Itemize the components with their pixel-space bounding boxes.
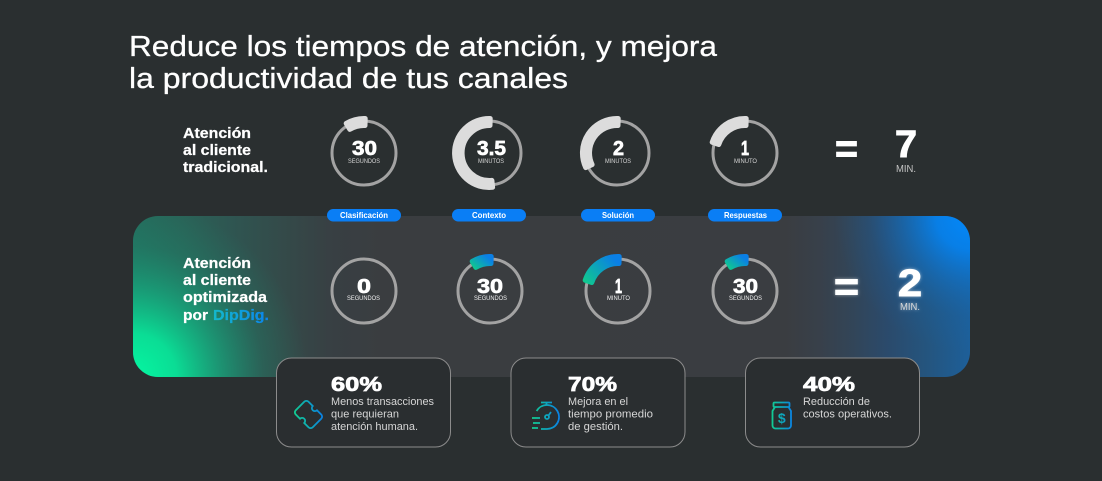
gauge: 1 minuto optimized: MINUTO — [607, 295, 630, 302]
gauge: 30 segundos optimized second: 30 — [733, 276, 758, 298]
card: 40%: 40% — [803, 374, 855, 396]
gauge: 0 segundos: 0 — [357, 276, 371, 298]
total: 2 min — [834, 263, 922, 313]
card: 60%: atención humana. — [331, 421, 418, 433]
gauge: 3.5 minutos: MINUTOS — [478, 158, 505, 165]
heading: traditional attention: al cliente — [183, 142, 251, 159]
gauge: 3.5 minutos — [455, 118, 521, 187]
gauge: 30 segundos optimized second — [713, 256, 777, 323]
total: 2 min: = — [834, 265, 859, 309]
total: 7 min — [835, 124, 917, 175]
total: 2 min: MIN. — [900, 302, 920, 313]
gauge: 1 minuto optimized — [585, 256, 650, 323]
gauge: 30 segundos optimized: SEGUNDOS — [474, 295, 508, 302]
pill: Contexto — [452, 209, 526, 222]
gauge: 30 segundos optimized: 30 — [477, 276, 503, 298]
pill: Solución — [581, 209, 655, 222]
gauge: 1 minuto: 1 — [741, 138, 749, 160]
heading: optimized attention — [183, 255, 269, 324]
heading: optimized attention: al cliente — [183, 272, 251, 289]
gauge: 30 segundos optimized second: SEGUNDOS — [729, 295, 763, 302]
gauge: 0 segundos — [332, 259, 396, 323]
heading: traditional attention: Atención — [183, 125, 251, 142]
heading: traditional attention: tradicional. — [183, 159, 268, 176]
pill: Clasificación: Clasificación — [340, 210, 388, 220]
gauge: 2 minutos — [582, 118, 649, 185]
card: 70%: Mejora en el — [568, 396, 628, 408]
heading: traditional attention — [183, 125, 268, 176]
card: 60% — [276, 358, 450, 447]
card: 60%: que requieran — [331, 408, 399, 420]
heading: optimized attention: por — [183, 307, 208, 324]
gauge: 2 minutos: 2 — [613, 138, 624, 160]
card: 70%: 70% — [568, 374, 617, 396]
gauge: 2 minutos: MINUTOS — [605, 158, 632, 165]
heading: optimized attention: Atención — [183, 255, 251, 272]
total: 7 min: = — [835, 127, 858, 171]
card: 60%: Menos transacciones — [331, 396, 434, 408]
pill: Respuestas: Respuestas — [724, 210, 767, 220]
card: 40%: Reducción de — [803, 396, 870, 408]
card: 70%: de gestión. — [568, 421, 623, 433]
total: 7 min: 7 — [895, 124, 917, 166]
icon: stopwatch — [532, 402, 559, 429]
card: 40%: costos operativos. — [803, 408, 892, 420]
gauge: 1 minuto: MINUTO — [734, 158, 757, 165]
pill: Clasificación — [327, 209, 401, 222]
card: 40% — [746, 358, 920, 447]
gauge: 30 segundos: 30 — [352, 138, 377, 160]
pill: Solución: Solución — [602, 210, 634, 220]
title: Reduce los tiempos de atención, y mejora — [129, 31, 718, 63]
panel: optimized attention background — [133, 216, 970, 377]
title — [129, 31, 718, 95]
pill: Respuestas — [708, 209, 782, 222]
title: la productividad de tus canales — [129, 63, 568, 95]
gauge: 30 segundos optimized — [458, 256, 522, 323]
card: 70%: tiempo promedio — [568, 408, 653, 420]
gauge: 3.5 minutos: 3.5 — [477, 138, 506, 160]
icon: money jar: $ — [778, 410, 786, 426]
heading: optimized attention: optimizada — [183, 289, 268, 306]
total: 7 min: MIN. — [896, 164, 916, 175]
card: 70% — [511, 358, 685, 447]
gauge: 0 segundos: SEGUNDOS — [347, 295, 381, 302]
gauge: 30 segundos: SEGUNDOS — [348, 158, 381, 165]
pill: Contexto: Contexto — [472, 210, 506, 220]
heading: optimized attention: DipDig. — [213, 307, 269, 324]
card: 60%: 60% — [331, 374, 382, 396]
gauge: 30 segundos — [332, 118, 396, 185]
icon: ticket — [294, 400, 323, 429]
gauge: 1 minuto — [712, 118, 777, 185]
total: 2 min: 2 — [898, 263, 922, 305]
icon: money jar — [772, 402, 791, 428]
gauge: 1 minuto optimized: 1 — [615, 276, 622, 298]
